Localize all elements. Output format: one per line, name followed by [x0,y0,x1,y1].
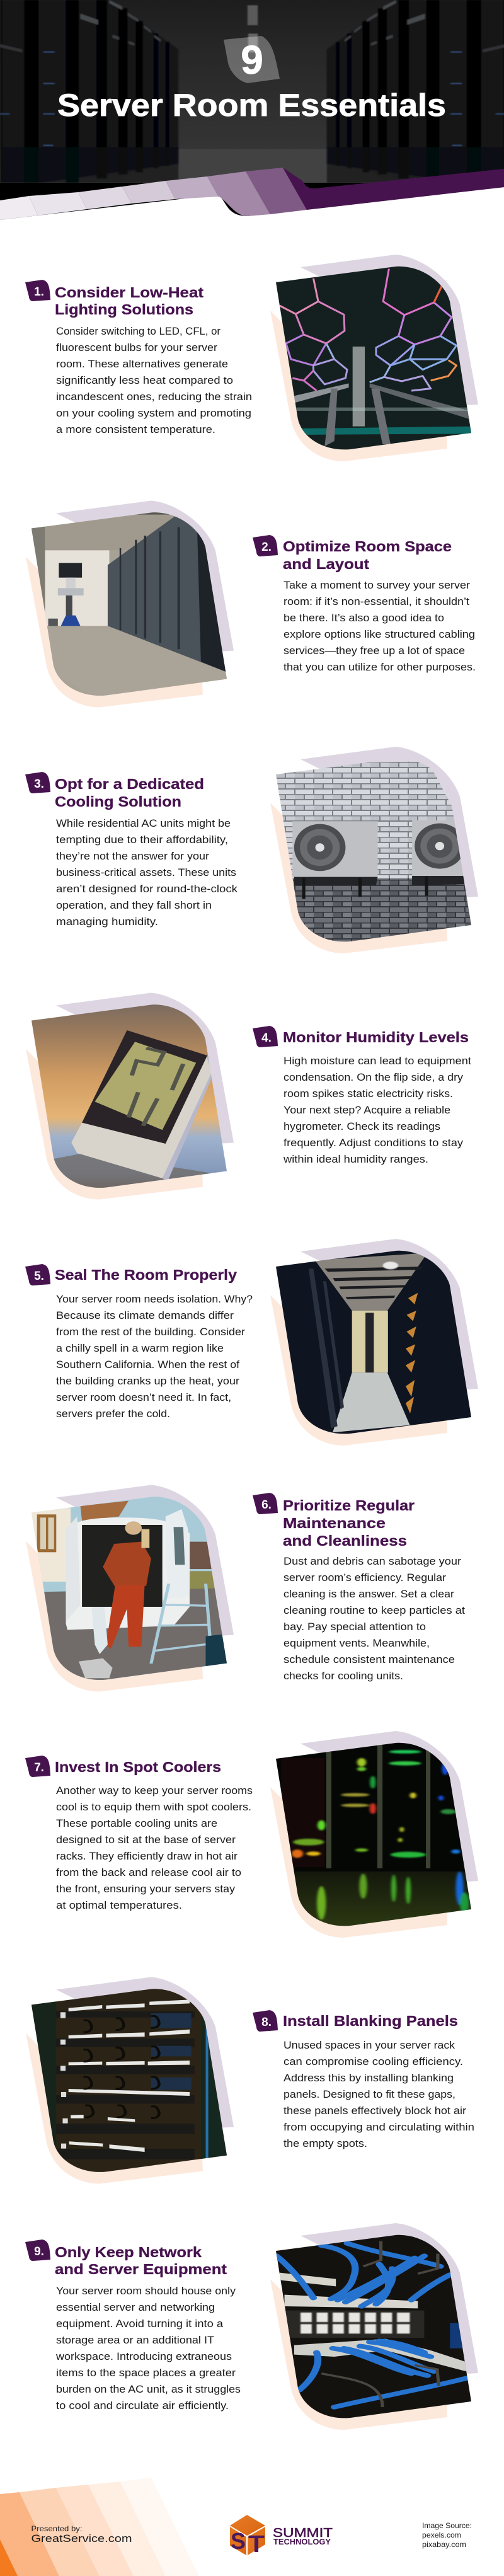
body text: racks. They efficiently draw in hot air [56,1850,238,1862]
heading: Install Blanking Panels [283,2013,458,2029]
body text: These portable cooling units are [56,1817,217,1829]
body text: panels. Designed to fit these gaps, [284,2088,455,2100]
photo: wall AC units [270,745,482,953]
image source [422,2521,472,2549]
heading: Cooling Solution [55,793,181,810]
number 9: 9 [241,37,263,83]
body text: burden on the AC unit, as it struggles [56,2383,241,2395]
number badge 9 [25,2240,50,2261]
body text: server room’s efficiency. Regular [284,1572,446,1584]
number badge 9: 9. [34,2245,44,2258]
number badge 6 [253,1493,278,1514]
number badge 4 [253,1026,278,1047]
panel: 5 seal the room [25,1239,482,1446]
body text: significantly less heat compared to [56,374,233,386]
heading: and Layout [283,556,369,572]
body text: a chilly spell in a warm region like [56,1342,224,1354]
body text: Your server room should house only [56,2285,236,2297]
photo: hygrometer [26,992,234,1200]
number badge 8 [253,2010,278,2032]
panel: 3 dedicated cooling [25,745,482,953]
body text: at optimal temperatures. [56,1899,182,1911]
body text: explore options like structured cabling [284,628,475,640]
body text: the front, ensuring your servers stay [56,1883,236,1895]
number badge 5: 5. [34,1270,44,1283]
body text: they’re not the answer for your [56,850,209,862]
body text: these panels effectively block hot air [284,2105,466,2117]
logo: Summit Technology [230,2515,333,2558]
body text [283,1055,471,1165]
body text: to cool and circulate air efficiently. [56,2400,229,2412]
body text: room: if it’s non-essential, it shouldn’t [284,595,469,607]
body text: that you can utilize for other purposes. [284,661,476,673]
header panel [0,0,504,290]
logo: Summit Technology: SUMMIT [273,2526,333,2540]
body text: room spikes static electricity risks. [284,1088,453,1100]
number badge 3: 3. [34,778,44,791]
body text: cool is to equip them with spot coolers. [56,1801,251,1813]
presented by: GreatService.com [32,2533,132,2544]
body text: equipment. Avoid turning it into a [56,2318,224,2330]
body text: Your next step? Acquire a reliable [284,1104,450,1116]
photo: rack lights at night [270,1731,482,1938]
body text: server room doesn’t need it. In fact, [56,1391,231,1403]
logo: Summit Technology: T [248,2531,265,2558]
body text: cleaning is the answer. Set a clear [284,1588,454,1600]
body text: Consider switching to LED, CFL, or [56,325,220,337]
body text: Unused spaces in your server rack [284,2039,455,2051]
heading: Prioritize Regular [283,1497,415,1514]
presented by: Presented by: [32,2524,82,2533]
body text: storage area or an additional IT [56,2334,214,2346]
heading: Consider Low-Heat [55,284,203,301]
heading: Maintenance [283,1515,386,1531]
number badge 5 [25,1264,50,1285]
heading: Only Keep Network [55,2244,202,2260]
body text: items to the space places a greater [56,2367,236,2379]
body text [56,325,252,435]
heading [283,538,452,572]
body text [56,1785,253,1911]
panel: 4 humidity [26,992,471,1200]
heading: Opt for a Dedicated [55,776,204,792]
panel: 2 room space and layout [26,493,476,707]
body text: bay. Pay special attention to [284,1621,426,1633]
body text: managing humidity. [56,916,158,928]
body text: a more consistent temperature. [56,423,215,435]
heading: Optimize Room Space [283,538,452,555]
number badge 8: 8. [261,2016,272,2029]
footer stripes [0,2478,199,2576]
body text: from the back and release cool air to [56,1866,241,1878]
body text: condensation. On the flip side, a dry [284,1071,464,1083]
body text: the building cranks up the heat, your [56,1375,239,1387]
body text: can compromise cooling efficiency. [284,2056,463,2067]
photo: blue network cables [270,2223,482,2430]
body text: from occupying and circulating within [284,2121,474,2133]
body text: the empty spots. [284,2137,367,2149]
number badge 3 [25,772,50,793]
body text: fluorescent bulbs for your server [56,342,217,354]
logo: Summit Technology: TECHNOLOGY [273,2537,331,2546]
body text: servers prefer the cold. [56,1408,170,1420]
number badge 2 [253,535,278,556]
body text [284,2039,474,2149]
image source: pixabay.com [422,2540,466,2549]
body text: While residential AC units might be [56,817,231,829]
body text: within ideal humidity ranges. [283,1153,428,1165]
heading: and Server Equipment [55,2261,227,2277]
panel: 1 low-heat lighting [25,255,478,461]
heading [55,776,204,810]
body text [55,2285,241,2412]
body text: Because its climate demands differ [56,1309,234,1321]
image source: pexels.com [422,2531,461,2539]
panel: 7 spot coolers [25,1731,482,1938]
body text: business-critical assets. These units [56,866,236,878]
title: Server Room Essentials [57,88,446,123]
heading: Invest In Spot Coolers [55,1759,221,1775]
heading [55,2244,227,2277]
body text: frequently. Adjust conditions to stay [284,1137,464,1149]
footer [0,2478,472,2576]
body text: hygrometer. Check its readings [284,1120,440,1132]
body text: incandescent ones, reducing the strain [56,391,252,403]
photo: patch panels [26,1977,234,2184]
body text: room. These alternatives generate [56,358,228,370]
body text: operation, and they fall short in [56,899,212,911]
logo: Summit Technology: S [231,2528,246,2554]
body text: Another way to keep your server rooms [56,1785,253,1797]
body text: on your cooling system and promoting [56,407,251,419]
heading: Lighting Solutions [55,301,193,318]
number badge 2: 2. [261,541,272,554]
body text: Southern California. When the rest of [56,1359,239,1371]
body text: Dust and debris can sabotage your [284,1555,461,1567]
body text: cleaning routine to keep particles at [284,1604,465,1616]
body text: Your server room needs isolation. Why? [56,1293,253,1305]
body text: checks for cooling units. [284,1670,403,1682]
number badge 1 [25,280,50,301]
number badge 1: 1. [34,285,44,299]
body text: Take a moment to survey your server [284,579,470,591]
body text: Address this by installing blanking [284,2072,454,2084]
photo: hexagon lights [270,255,478,461]
image source: Image Source: [422,2521,472,2530]
body text [56,817,238,928]
panel: 8 blanking panels [26,1977,474,2184]
photo: cleaner by van [26,1485,234,1691]
body text: workspace. Introducing extraneous [55,2350,232,2362]
number badge backdrop [224,36,280,83]
panel: 9 network equipment only [25,2223,482,2430]
body text: designed to sit at the base of server [56,1834,236,1846]
body text: tempting due to their affordability, [56,834,228,846]
heading: and Cleanliness [283,1532,407,1549]
heading: Monitor Humidity Levels [283,1029,469,1045]
body text: essential server and networking [56,2301,215,2313]
header photo: server aisle [0,0,504,183]
body text [284,1555,465,1682]
heading: Seal The Room Properly [55,1267,237,1283]
number badge 7: 7. [34,1761,44,1774]
body text: services—they free up a lot of space [284,645,465,657]
photo: data hall [26,493,234,707]
number badge 4: 4. [261,1032,272,1045]
photo: cold aisle [270,1239,482,1446]
number badge 7 [25,1756,50,1777]
number badge 6: 6. [261,1498,272,1512]
body text [284,579,476,673]
body text: aren’t designed for round-the-clock [56,883,238,895]
body text: equipment vents. Meanwhile, [284,1637,430,1649]
heading [55,284,203,318]
presented by [32,2524,132,2544]
body text [56,1293,253,1420]
body text: schedule consistent maintenance [284,1653,455,1665]
body text: be there. It’s also a good idea to [284,612,444,624]
black strip and ribbon [0,168,504,290]
heading [283,1497,415,1549]
body text: from the rest of the building. Consider [56,1326,245,1338]
panel: 6 maintenance [26,1485,465,1691]
body text: High moisture can lead to equipment [284,1055,471,1067]
